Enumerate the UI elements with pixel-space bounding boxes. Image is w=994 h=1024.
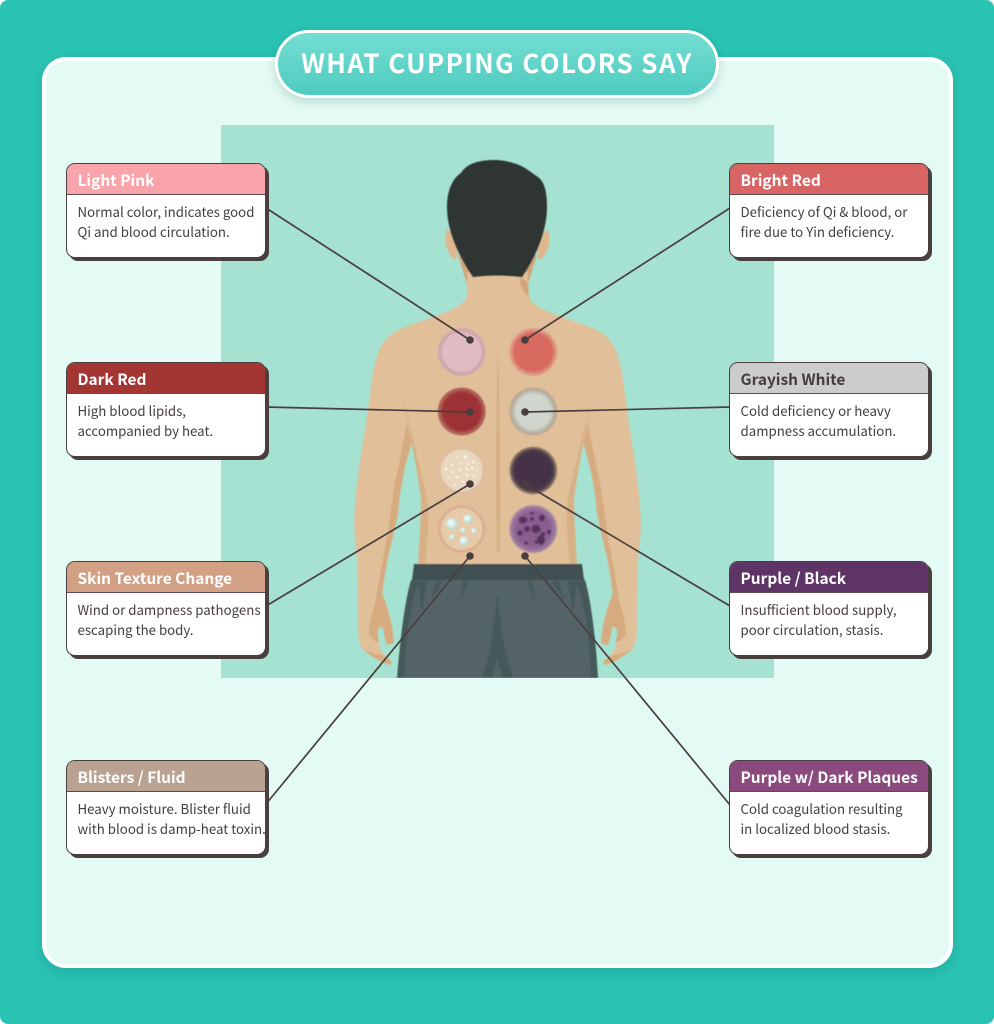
cupping mark: dark red [438,388,486,436]
card: blisters fluid: Heavy moisture. Blister fluid [78,799,251,818]
card: purple black [728,560,928,656]
cupping mark: skin texture [438,446,486,494]
card: purple black: poor circulation, stasis. [740,620,883,638]
card: grayish white: Grayish White [740,368,845,390]
cupping mark: blisters [438,505,486,553]
card: bright red: Bright Red [740,168,821,190]
card: dark red: accompanied by heat. [78,420,213,440]
card: skin texture change: escaping the body. [78,620,194,638]
cupping mark: light pink [438,328,486,376]
card: light pink [66,162,266,258]
hand shading [364,597,394,665]
card: skin texture change: Wind or dampness pathogens [78,600,261,619]
cupping mark: bright red [509,328,557,376]
card: purple black: Purple / Black [740,566,846,588]
cupping mark: purple with dark plaques [509,505,557,553]
card: grayish white: Cold deficiency or heavy [740,401,891,420]
card: light pink: Normal color, indicates good [78,202,254,221]
title: WHAT CUPPING COLORS SAY [301,44,693,80]
card: light pink: Qi and blood circulation. [78,222,230,240]
card: purple with dark plaques [728,760,928,854]
title [275,30,719,98]
neck side shadow [520,277,529,298]
teal background square [221,125,774,678]
torso side shading [400,392,428,566]
spine [496,350,500,552]
right half of body [497,272,641,665]
card: blisters fluid: with blood is damp-heat toxin. [78,818,266,838]
card: dark red [66,362,266,456]
card: skin texture change [66,560,266,656]
cupping mark: purple black [509,446,557,494]
shorts [397,564,598,678]
card: purple black: Insufficient blood supply, [740,600,897,619]
left half of body [354,272,498,665]
card: light pink: Light Pink [78,168,154,190]
card: purple with dark plaques: Purple w/ Dark Plaques [740,766,918,788]
card: grayish white: dampness accumulation. [740,420,896,440]
figure: arms, torso, neck [354,229,641,678]
arm inner shading [376,423,412,610]
card: dark red: Dark Red [78,368,146,390]
card: blisters fluid: Blisters / Fluid [78,766,186,788]
hair [447,160,547,277]
cupping mark: grayish white [509,388,557,436]
card: bright red: fire due to Yin deficiency. [740,222,894,240]
illustration: man's back with cupping marks [221,125,774,678]
card: blisters fluid [66,760,266,854]
card: dark red: High blood lipids, [78,401,186,420]
ears [445,229,550,260]
neck shadow [458,255,537,284]
card: skin texture change: Skin Texture Change [78,566,232,588]
card: purple with dark plaques: in localized blood stasis. [740,818,890,838]
card: bright red: Deficiency of Qi & blood, or [740,202,907,221]
card: purple with dark plaques: Cold coagulation resulting [740,799,903,818]
card: grayish white [728,362,928,456]
card: bright red [728,162,928,258]
